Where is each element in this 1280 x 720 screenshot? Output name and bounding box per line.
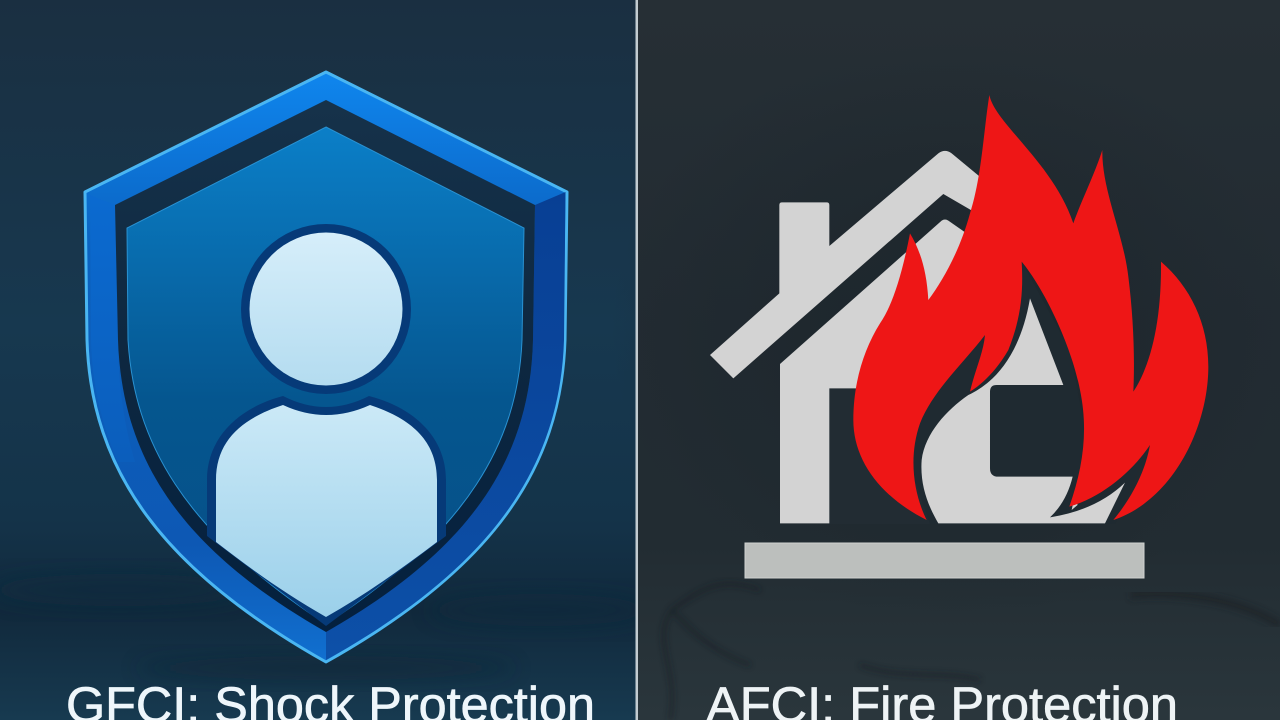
- shield rim left bevel: [90, 195, 135, 462]
- icon: shield with person: [85, 72, 567, 662]
- divider: [636, 0, 638, 720]
- dark gap behind inner flame: [907, 262, 1150, 524]
- person head: [241, 224, 411, 394]
- inner flame cut-out: [921, 298, 1125, 523]
- ground bar: [745, 543, 1144, 578]
- panel: GFCI background: [0, 0, 650, 720]
- house wall: [780, 219, 1083, 523]
- shield rim: [85, 72, 567, 662]
- flame: [853, 95, 1208, 520]
- person body: [207, 396, 446, 626]
- house roof and chimney: [710, 151, 1000, 378]
- panel: AFCI background: [610, 0, 1280, 720]
- shield dark gap: [115, 100, 535, 632]
- house front opening: [829, 388, 933, 524]
- icon: house on fire: [710, 95, 1208, 578]
- shield inner panel: [127, 127, 524, 624]
- shield rim right shade: [326, 192, 566, 660]
